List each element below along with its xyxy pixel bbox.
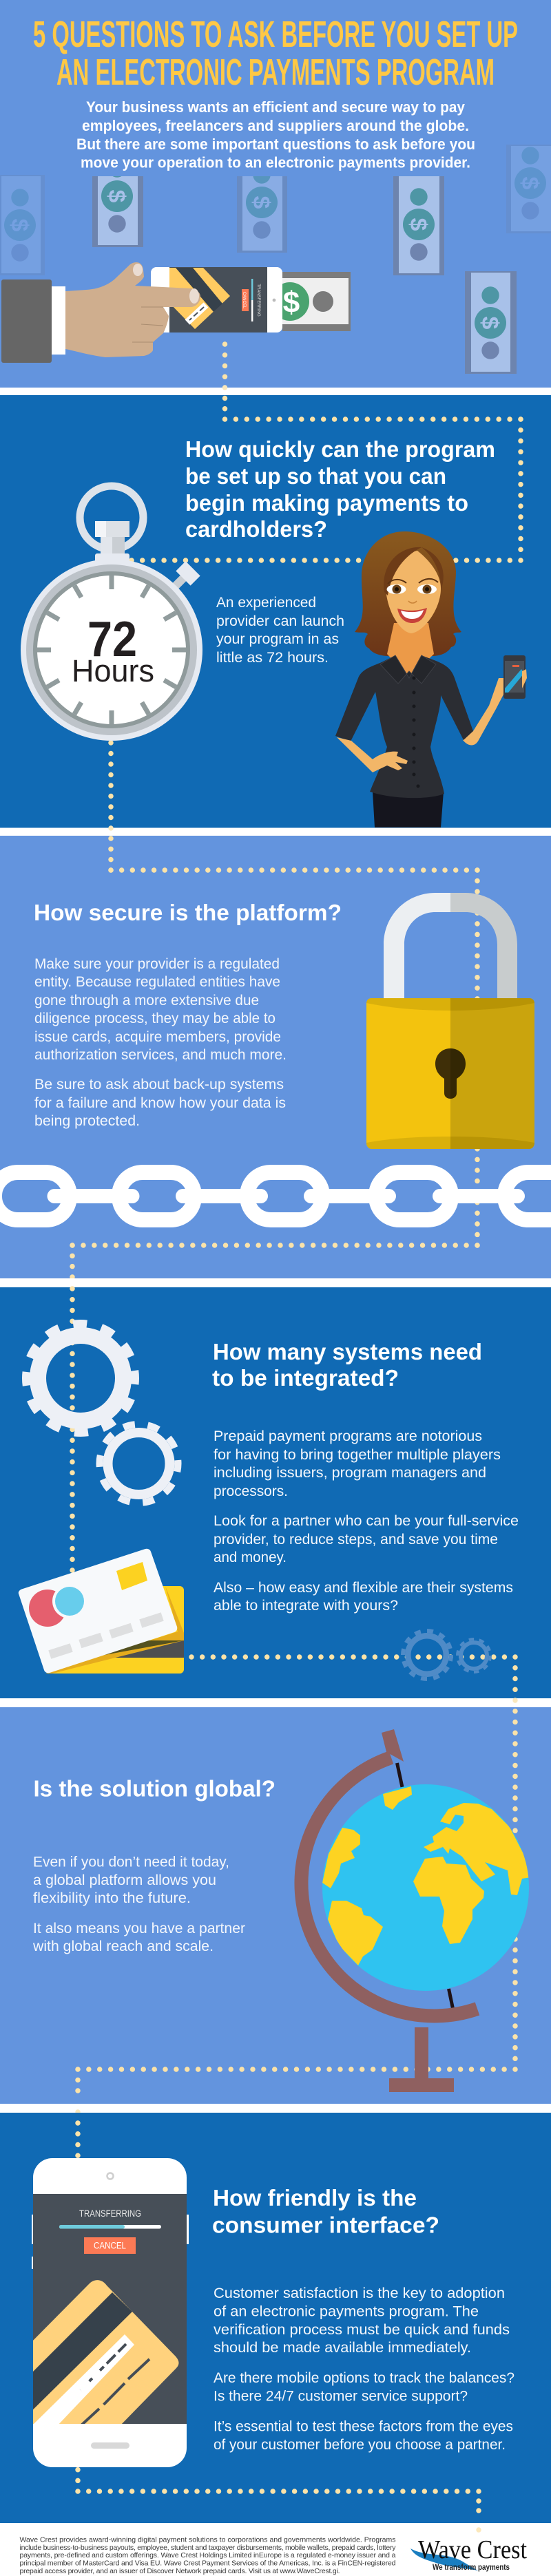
phone screen: transferring: TRANSFERRING [79, 2208, 141, 2219]
text: body: Is there 24/7 customer service support? [214, 2389, 468, 2404]
text: body: Also – how easy and flexible are their systems [214, 1580, 513, 1596]
panel: how quickly [0, 395, 551, 828]
connector dot [222, 385, 227, 390]
title [33, 14, 518, 93]
intro text: employees, freelancers and suppliers around the globe. [82, 117, 469, 134]
text: short answer: little as 72 hours. [216, 650, 329, 666]
text: short answer [216, 595, 344, 666]
phone screen: card [21, 2280, 179, 2427]
icon: stopwatch: Hours [72, 653, 154, 688]
intro text [76, 98, 475, 171]
connector dot [108, 825, 114, 831]
text: body: for having to bring together multiple players [214, 1447, 501, 1463]
text: body: entity. Because regulated entities have [34, 974, 280, 990]
icon: stopwatch: 72 [87, 612, 137, 667]
text: body: of an electronic payments program. The [214, 2303, 479, 2320]
text: body: provider, to reduce steps, and save you time [214, 1532, 498, 1548]
band: white divider 3 [0, 1278, 551, 1287]
panel: footer [0, 2523, 551, 2576]
dotted path: section 2 [111, 398, 521, 828]
text: body: for a failure and know how your data is [34, 1095, 286, 1111]
dotted path: section 6 [78, 2123, 479, 2520]
icon: bill behind phone: $ [283, 286, 300, 319]
text: body: being protected. [34, 1113, 140, 1129]
band: white divider 2 [0, 827, 551, 836]
intro text: But there are some important questions to ask before you [76, 136, 475, 153]
text: body: including issuers, program managers and [214, 1465, 486, 1481]
text: body: Look for a partner who can be your full-service [214, 1513, 519, 1529]
text: body: Even if you don’t need it today, [33, 1855, 229, 1870]
icon: faded bill left [0, 175, 45, 275]
logo: Wave Crest: We transform payments [433, 2562, 510, 2572]
icon: phone with card: CANCEL [242, 292, 246, 309]
icon: chain [0, 1172, 551, 1220]
text: body: It’s essential to test these factors from the eyes [214, 2419, 513, 2434]
heading [212, 2185, 439, 2237]
icon: bill 5: $ [477, 317, 503, 330]
icon: bill 2: $ [103, 190, 129, 203]
icon: faded bill right: $ [517, 177, 543, 190]
text: body [214, 2285, 514, 2453]
text: disclaimer: payments, pre-defined and custom offerings. Wave Crest Holdings Limited inEurope is a regulated e-money issuer and a [19, 2551, 396, 2559]
dotted path: section 3 [72, 838, 477, 1277]
panel: how many systems [0, 1287, 551, 1700]
connector dot [75, 2109, 81, 2115]
text: body: processors. [214, 1484, 288, 1499]
text: body: a global platform allows you [33, 1872, 216, 1888]
icon: phone [21, 2158, 189, 2467]
heading: consumer interface? [212, 2213, 439, 2237]
band: white divider 1 [0, 388, 551, 395]
icon: credit cards [19, 1549, 184, 1674]
icon: bill 3: $ [248, 196, 274, 209]
text: body: flexibility into the future. [33, 1890, 191, 1906]
text: short answer: provider can launch [216, 613, 344, 629]
text: disclaimer: Wave Crest provides award-winning digital payment solutions to corporations and governments worldwide. Programs [19, 2536, 395, 2544]
heading [212, 1339, 482, 1391]
heading: How secure is the platform? [34, 900, 342, 925]
intro text: Your business wants an efficient and secure way to pay [86, 98, 466, 116]
panel: how secure [0, 836, 551, 1278]
text: body: and money. [214, 1550, 287, 1565]
heading: cardholders? [185, 516, 327, 542]
band: white divider 5 [0, 2104, 551, 2113]
icon: faded bill right [506, 145, 551, 233]
text: short answer: your program in as [216, 631, 339, 647]
icon: bill 3 [237, 176, 287, 253]
text: short answer: An experienced [216, 595, 316, 611]
text: body: Make sure your provider is a regulated [34, 956, 280, 972]
icon: faded bill left: $ [6, 219, 32, 232]
heading: How friendly is the [213, 2185, 417, 2210]
text: body: gone through a more extensive due [34, 993, 259, 1009]
logo: Wave Crest [410, 2535, 527, 2572]
icon: globe [301, 1729, 530, 2092]
connector dot [512, 1698, 518, 1703]
text: body: with global reach and scale. [32, 1939, 214, 1954]
icon: padlock [366, 893, 534, 1149]
icon: bill 2 [92, 176, 143, 247]
illustration: woman with phone [335, 531, 527, 827]
heading: How many systems need [213, 1339, 482, 1364]
text: body [34, 956, 287, 1129]
text: body: Prepaid payment programs are notorious [214, 1428, 482, 1444]
text: disclaimer: principal member of MasterCard and Visa EU. Wave Crest Payment Services of the Americas, Inc. is a FinCEN-registered [19, 2559, 396, 2568]
icon: small gear [96, 1421, 181, 1506]
icon: pale gears [403, 1631, 490, 1679]
text: body: Are there mobile options to track the balances? [214, 2370, 514, 2386]
text: body: issue cards, acquire members, provide [34, 1029, 281, 1045]
dotted path: section 5 [78, 1711, 515, 2101]
text: body: Be sure to ask about back-up systems [34, 1077, 284, 1092]
icon: bill 4 [393, 172, 444, 275]
dotted path: header [222, 344, 227, 388]
icon: phone: CANCEL [94, 2240, 126, 2251]
text: body [32, 1855, 245, 1954]
text: disclaimer: include business-to-business payouts, employee, student and taxpayer disbursements, mobile wallets, prepaid cards, lottery [19, 2544, 396, 2552]
icon: bill 5 [465, 271, 517, 374]
text: body: verification process must be quick and funds [214, 2322, 510, 2338]
text: body: authorization services, and much more. [34, 1047, 287, 1063]
text: disclaimer: prepaid access provider, and an issuer of Discover Network prepaid cards. Visit us at www.WaveCrest.gi. [19, 2567, 340, 2575]
panel: how friendly [0, 2113, 551, 2523]
text: body: of your customer before you choose a partner. [214, 2437, 506, 2453]
heading [185, 436, 495, 542]
text: body: Customer satisfaction is the key to adoption [214, 2285, 505, 2301]
text: body: able to integrate with yours? [214, 1598, 398, 1614]
heading: to be integrated? [212, 1365, 399, 1391]
logo: Wave Crest: Wave Crest [418, 2535, 527, 2564]
icon: hand [1, 262, 200, 363]
panel: is the solution global [0, 1707, 551, 2104]
icon: phone with card [151, 267, 282, 332]
icon: bill behind phone [271, 272, 351, 331]
heading: begin making payments to [185, 490, 468, 516]
text: body [214, 1428, 519, 1614]
heading: How quickly can the program [185, 436, 495, 462]
text: disclaimer [19, 2536, 396, 2575]
text: body: should be made available immediately. [214, 2340, 471, 2356]
panel: header [0, 0, 551, 388]
text: body: It also means you have a partner [33, 1921, 245, 1936]
text: body: diligence process, they may be able to [34, 1011, 276, 1026]
icon: large gear [19, 1317, 142, 1439]
heading: be set up so that you can [185, 463, 446, 489]
icon: bill 4: $ [405, 218, 431, 231]
icon: phone with card: TRANSFERRING [256, 284, 260, 317]
intro text: move your operation to an electronic payments provider. [81, 154, 470, 171]
icon: stopwatch [21, 486, 202, 741]
band: white divider 4 [0, 1698, 551, 1707]
dotted path: section 4 [72, 1289, 515, 1700]
heading: Is the solution global? [33, 1776, 276, 1801]
